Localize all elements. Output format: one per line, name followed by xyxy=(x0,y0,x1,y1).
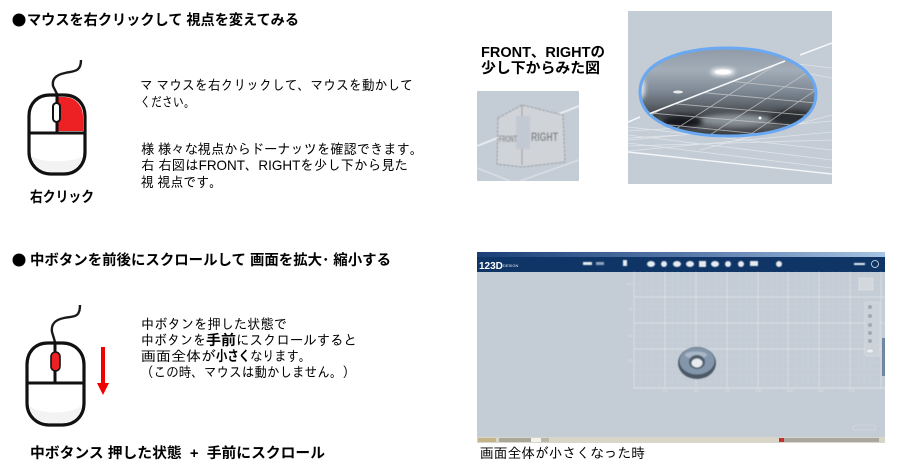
toolbar: 123D xyxy=(479,261,503,272)
units button xyxy=(853,425,876,430)
taskbar xyxy=(477,437,885,443)
caption: screen became smaller: 画面全体が小さくなった時 xyxy=(480,445,645,461)
caption: view from below xyxy=(481,45,605,77)
text: scroll instructions: 画面全体が xyxy=(141,348,216,364)
text: scroll instructions: 中ボタンを xyxy=(141,332,206,348)
axis numbers: 50 xyxy=(694,388,699,393)
donut model xyxy=(678,347,716,379)
text: right click instructions xyxy=(140,77,423,190)
title bar xyxy=(477,252,885,257)
view cube button xyxy=(859,278,873,290)
text: right click instructions: ください。 xyxy=(140,94,195,110)
heading: scroll section: 中ボタンを前後にスクロールして 画面を拡大･ 縮小する xyxy=(30,251,391,269)
caption: view from below: 少し下からみた図 xyxy=(481,60,600,77)
navigation bar xyxy=(865,302,880,356)
axis numbers: 50 xyxy=(628,333,633,338)
axis numbers: 75 xyxy=(628,307,633,312)
text: scroll instructions: にスクロールすると xyxy=(236,332,357,348)
label: right click: 右クリック xyxy=(30,189,94,206)
text: right click instructions: 視 視点です。 xyxy=(141,174,222,190)
axis numbers: 100 xyxy=(626,281,633,286)
text: right click instructions: 右 右図はFRONT、RIGHTを少し下から見た xyxy=(141,157,408,173)
axis numbers: 25 xyxy=(663,388,668,393)
axis numbers: 100 xyxy=(755,388,762,393)
toolbar: DESIGN xyxy=(503,263,518,268)
text: right click instructions: マ マウスを右クリックして、マウスを動かして xyxy=(140,77,413,93)
grid xyxy=(634,272,885,388)
panel: view cube: FRONT xyxy=(499,134,517,144)
axis numbers xyxy=(626,281,855,393)
text: scroll instructions: なります。 xyxy=(250,348,311,364)
panel: torus viewed from below xyxy=(628,11,832,184)
axis numbers: 25 xyxy=(628,358,633,363)
side handle xyxy=(882,338,885,376)
heading: right click section: マウスを右クリックして 視点を変えてみる xyxy=(27,11,299,29)
text: scroll instructions: 小さく xyxy=(216,348,250,364)
icon: mouse with right button highlighted xyxy=(29,60,85,174)
text: scroll instructions: （この時、マウスは動かしません。） xyxy=(141,364,355,380)
axis numbers: 150 xyxy=(817,388,824,393)
toolbar xyxy=(477,257,885,272)
panel: view cube xyxy=(477,91,579,181)
arrow: scroll toward you xyxy=(97,347,109,395)
caption: view from below: FRONT、RIGHTの xyxy=(481,45,605,61)
text: scroll instructions: 手前 xyxy=(206,332,236,348)
text: scroll instructions: 中ボタンを押した状態で xyxy=(141,316,287,332)
axis numbers: 75 xyxy=(725,388,730,393)
text: scroll instructions xyxy=(141,316,357,380)
panel: view cube: RIGHT xyxy=(531,130,558,144)
label: press and scroll: 中ボタンス 押した状態 + 手前にスクロール xyxy=(30,444,326,462)
panel: application screenshot xyxy=(477,252,885,443)
axis numbers: 125 xyxy=(786,388,793,393)
text: right click instructions: 様 様々な視点からドーナッツを確認できます。 xyxy=(141,141,423,157)
axis numbers: 175 xyxy=(848,388,855,393)
icon: mouse with red scroll wheel xyxy=(27,305,84,425)
